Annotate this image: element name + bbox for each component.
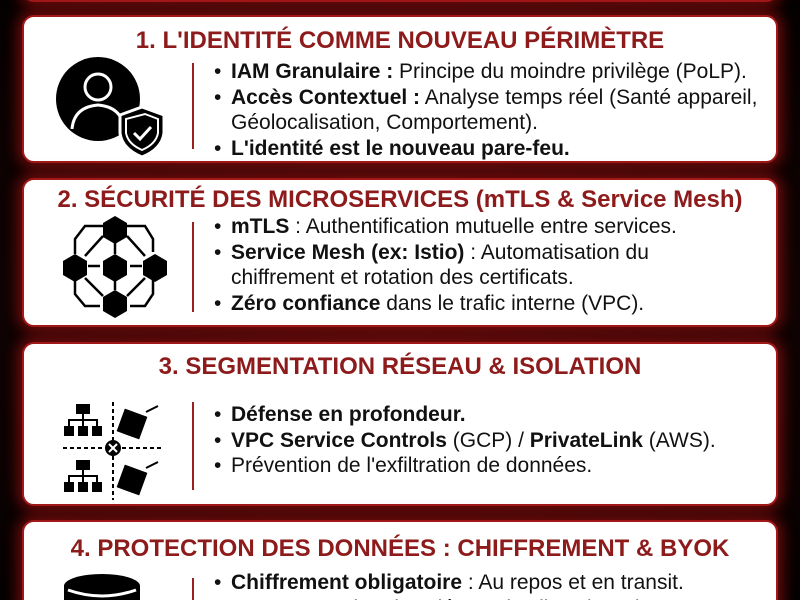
panel: data protection (22, 520, 778, 600)
bullets 1: Géolocalisation, Comportement). (231, 111, 538, 134)
icon: database (64, 574, 140, 600)
heading 1: 1. L'IDENTITÉ COMME NOUVEAU PÉRIMÈTRE (136, 27, 664, 54)
bullets 2: mTLS : Authentification mutuelle entre services. (231, 215, 677, 238)
bullets 2: Service Mesh (ex: Istio) : Automatisation du (231, 240, 649, 264)
bullets 3: Défense en profondeur. (231, 403, 466, 426)
icon: user with shield (56, 57, 163, 156)
bullets 3: VPC Service Controls (GCP) / PrivateLink (AWS). (231, 428, 716, 452)
heading 3: 3. SEGMENTATION RÉSEAU & ISOLATION (159, 353, 641, 380)
panel: identity (22, 15, 778, 163)
bullets 4: Chiffrement obligatoire : Au repos et en transit. (231, 571, 684, 594)
bullets 2 (214, 215, 677, 314)
heading 4: 4. PROTECTION DES DONNÉES : CHIFFREMENT & BYOK (71, 535, 729, 562)
panel: microservices (22, 178, 778, 327)
heading 2: 2. SÉCURITÉ DES MICROSERVICES (mTLS & Service Mesh) (57, 186, 743, 213)
bullets 1: L'identité est le nouveau pare-feu. (231, 136, 570, 160)
bullets 1: Accès Contextuel : Analyse temps réel (Santé appareil, (231, 86, 757, 108)
bullets 2: chiffrement et rotation des certificats. (231, 266, 574, 289)
bullets 1 (214, 60, 757, 160)
bullets 1: IAM Granulaire : Principe du moindre privilège (PoLP). (231, 60, 747, 83)
panel: segmentation (22, 342, 778, 506)
bullets 3 (214, 403, 716, 477)
icon: network segmentation (63, 402, 161, 500)
bullets 3: Prévention de l'exfiltration de données. (231, 454, 592, 477)
top panel remnant (22, 0, 778, 2)
icon: cube mesh (63, 216, 167, 318)
bullets 2: Zéro confiance dans le trafic interne (VPC). (231, 292, 644, 314)
